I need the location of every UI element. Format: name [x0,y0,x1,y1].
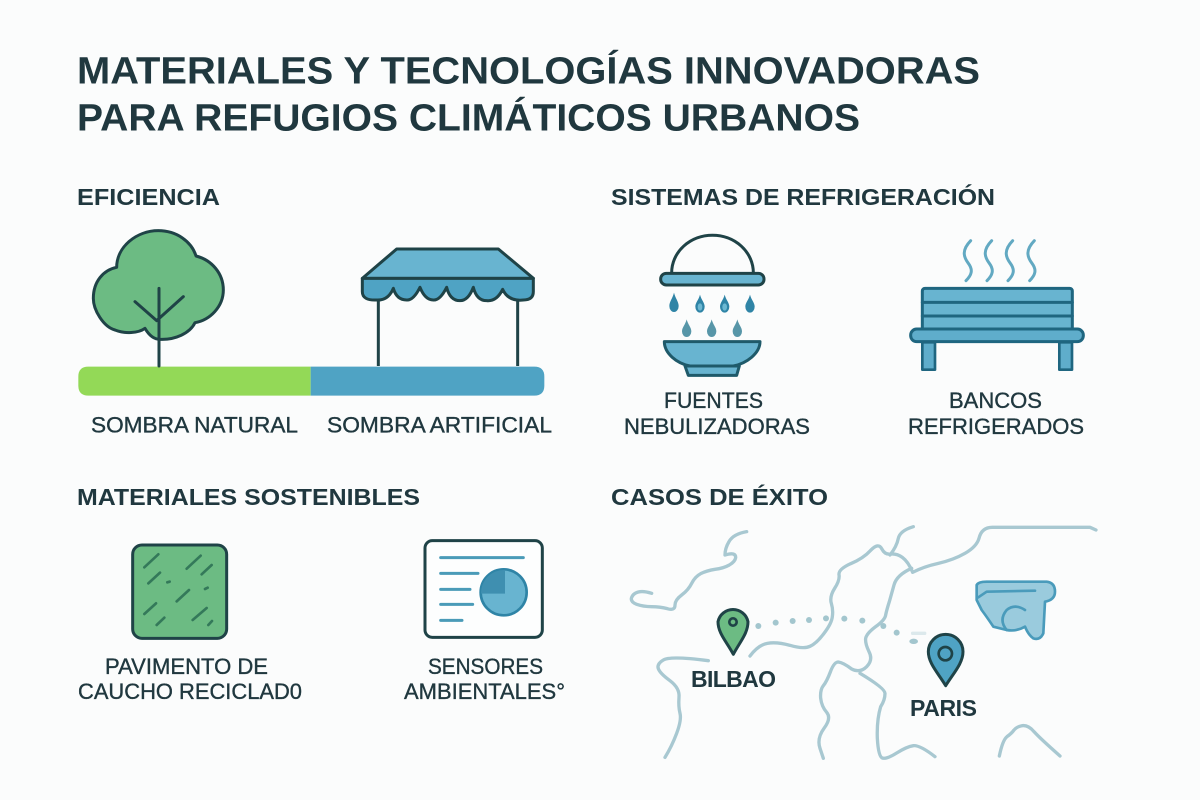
label: sensores ambientales: SENSORES [428,654,543,679]
title [77,48,980,140]
icon: sensor dashboard [425,541,542,637]
heading: casos de éxito: CASOS DE ÉXITO [611,483,828,510]
icon: canopy [362,249,533,366]
icon: recycled rubber pavement [133,545,227,638]
icon: cooled bench [911,241,1083,370]
label: bancos refrigerados [908,388,1084,439]
icon: tree [93,231,223,366]
label: pavimento de caucho reciclado: PAVIMENTO DE [105,654,268,679]
pin: paris [928,634,963,686]
label: bancos refrigerados: REFRIGERADOS [908,414,1084,439]
title: MATERIALES Y TECNOLOGÍAS INNOVADORAS [77,48,980,92]
panel: materiales sostenibles [77,484,565,704]
map: coastlines and borders [631,527,1096,758]
label: fuentes nebulizadoras: NEBULIZADORAS [624,414,810,439]
heading: eficiencia: EFICIENCIA [77,184,220,210]
label: sombra natural: SOMBRA NATURAL [91,412,298,438]
label: sombra artificial: SOMBRA ARTIFICIAL [327,412,552,438]
label: fuentes nebulizadoras: FUENTES [664,388,763,413]
icon: misting fountain [661,235,764,375]
label: pavimento de caucho reciclado: CAUCHO RECICLAD0 [78,679,302,704]
title: PARA REFUGIOS CLIMÁTICOS URBANOS [77,96,860,140]
label: sensores ambientales: AMBIENTALES° [404,679,565,704]
pin: bilbao [718,610,748,654]
heading: materiales sostenibles: MATERIALES SOSTENIBLES [77,484,420,510]
label: fuentes nebulizadoras [624,388,810,439]
region shape: blue territory [977,582,1055,639]
illustration: shade bar, tree and canopy [78,231,544,396]
panel: sistemas de refrigeración [611,183,1084,439]
label: pavimento de caucho reciclado [78,654,302,704]
heading: sistemas de refrigeración: SISTEMAS DE REFRIGERACIÓN [611,183,995,210]
shade bar [78,367,544,396]
panel: casos de éxito [611,483,1096,758]
route: dotted line bilbao to paris [755,615,926,644]
label: sensores ambientales [404,654,565,704]
label: bilbao: BILBAO [691,666,776,692]
label: bancos refrigerados: BANCOS [949,388,1042,413]
label: paris: PARIS [910,695,977,721]
panel: eficiencia [77,184,552,438]
